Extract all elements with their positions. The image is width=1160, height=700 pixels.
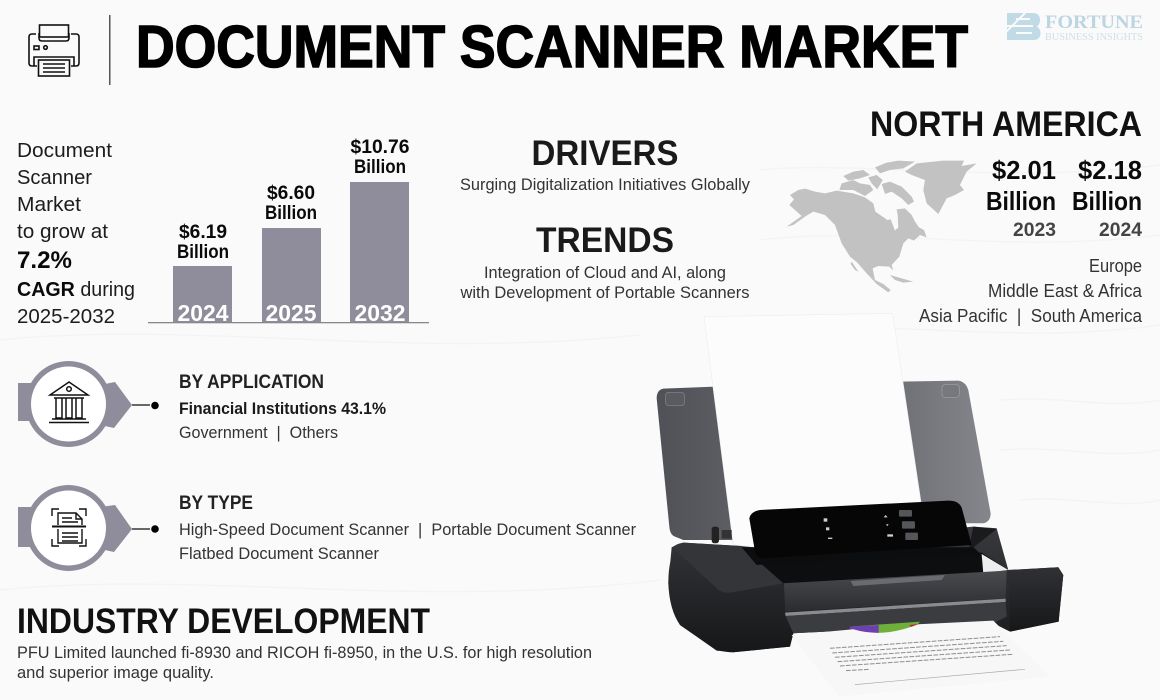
by type text: BY TYPE: [179, 493, 253, 514]
other regions: [919, 255, 1143, 326]
by application text: BY APPLICATION: [179, 372, 324, 393]
paper in feed: [704, 313, 922, 547]
industry development: and superior image quality.: [17, 663, 214, 682]
value 2023: 2023: [1013, 220, 1056, 241]
bar 2024: 2024: [178, 300, 228, 326]
trends: Integration of Cloud and AI, along: [484, 263, 726, 282]
lower front strip: [786, 602, 1007, 633]
text: market growth summary: [17, 139, 135, 328]
north america heading and values: [870, 105, 1142, 241]
text: market growth summary: Market: [17, 193, 81, 216]
header divider: [109, 15, 110, 85]
output paper: [792, 621, 1050, 697]
industry development: INDUSTRY DEVELOPMENT: [17, 602, 430, 641]
by type text: High-Speed Document Scanner | Portable Document Scanner: [179, 520, 636, 539]
bar 2025: $6.60: [267, 182, 315, 204]
value 2024: Billion: [1072, 186, 1142, 216]
chart peeking from output: [850, 622, 920, 634]
by application text: Financial Institutions 43.1%: [179, 399, 386, 418]
industry development: [17, 602, 592, 682]
bar 2024: [173, 221, 232, 326]
text: market growth summary: 7.2%: [17, 247, 72, 274]
text: market growth summary: Document: [17, 139, 112, 162]
logo: Fortune Business Insights: [1006, 12, 1143, 43]
trends: TRENDS: [536, 221, 674, 260]
right side: [1008, 567, 1063, 632]
map: North America: [787, 161, 977, 292]
left top face: [672, 543, 784, 593]
hinge: [712, 527, 719, 543]
value 2024: [1072, 155, 1142, 241]
bar 2032: [350, 136, 410, 326]
trends: [460, 221, 750, 302]
north america heading and values: NORTH AMERICA: [870, 105, 1142, 144]
by type text: [179, 493, 636, 563]
title: DOCUMENT SCANNER MARKET: [136, 14, 968, 80]
other regions: Middle East & Africa: [988, 280, 1143, 301]
bar 2025: [262, 182, 321, 326]
value 2024: $2.18: [1078, 155, 1142, 185]
value 2023: [986, 155, 1056, 241]
body: [668, 527, 1063, 652]
icon: by application badge: [18, 361, 159, 447]
industry development: PFU Limited launched fi-8930 and RICOH fi-8950, in the U.S. for high resolution: [17, 643, 592, 662]
bar 2032: $10.76: [350, 136, 410, 158]
value 2024: 2024: [1099, 220, 1142, 241]
drivers: Surging Digitalization Initiatives Globally: [460, 175, 750, 194]
bar 2025: Billion: [265, 203, 317, 224]
left wing: [657, 387, 733, 540]
icon: by type badge: [18, 485, 159, 571]
text: market growth summary: to grow at: [17, 220, 108, 243]
text: market growth summary: 2025-2032: [17, 305, 115, 328]
bar 2032: Billion: [354, 157, 406, 178]
value 2023: Billion: [986, 186, 1056, 216]
drivers: [460, 134, 750, 194]
scanner bed: [755, 553, 1008, 583]
trends: with Development of Portable Scanners: [460, 283, 750, 302]
bar 2024: $6.19: [179, 221, 227, 243]
value 2023: $2.01: [992, 155, 1056, 185]
text: market growth summary: CAGR during: [17, 278, 135, 301]
other regions: Asia Pacific | South America: [919, 305, 1143, 326]
text: market growth summary: Scanner: [17, 166, 92, 189]
logo: Fortune Business Insights: FORTUNE: [1045, 12, 1143, 33]
icon: printer: [29, 25, 79, 76]
other regions: Europe: [1089, 255, 1142, 276]
by type text: Flatbed Document Scanner: [179, 544, 379, 563]
front cover: [784, 571, 1007, 612]
bar 2032: 2032: [354, 300, 406, 326]
control panel: [742, 547, 980, 565]
bar chart: market size: [148, 136, 429, 326]
bar 2024: Billion: [177, 242, 229, 263]
illustration: printer scanner: [657, 313, 1063, 697]
drivers: DRIVERS: [532, 134, 678, 173]
by application text: Government | Others: [179, 423, 338, 442]
left front face: [668, 551, 793, 652]
bar 2025: 2025: [266, 300, 316, 326]
right wing: [900, 381, 991, 523]
logo: Fortune Business Insights: BUSINESS INSIGHTS: [1045, 32, 1143, 43]
by application text: [179, 372, 386, 442]
